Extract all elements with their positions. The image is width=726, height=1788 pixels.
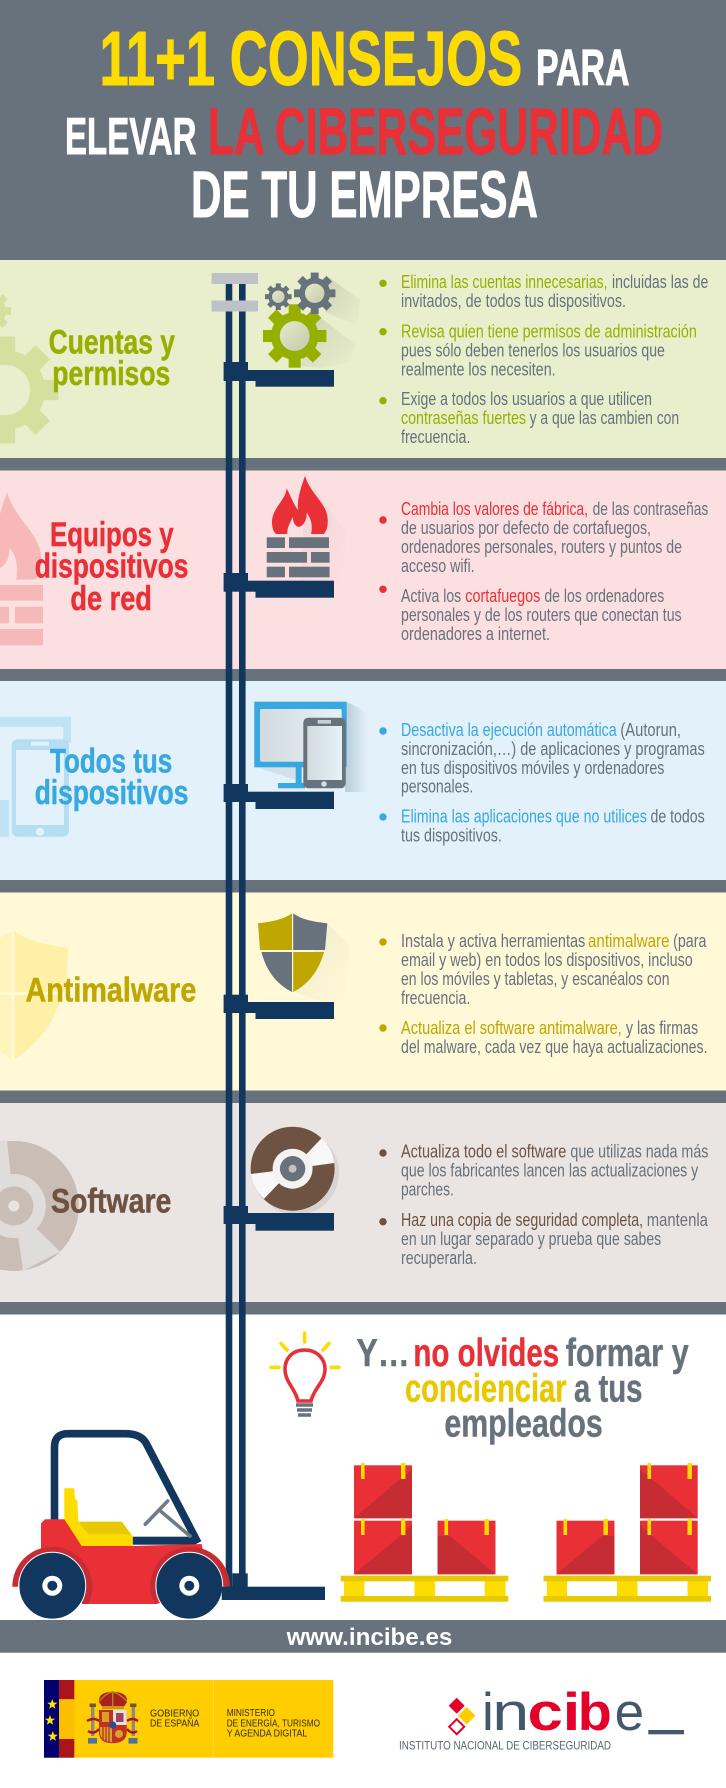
tip: cortafuegos: cortafuegos <box>465 586 540 606</box>
forklift <box>12 1434 325 1619</box>
heading: equipos y dispositivos de red <box>35 516 188 618</box>
icon: light bulb <box>271 1333 339 1415</box>
header background <box>0 0 726 261</box>
logo text <box>150 1707 320 1740</box>
tip: herramientas antimalware <box>379 931 707 1008</box>
tip: copia de seguridad: mantenla <box>647 1210 709 1230</box>
tip: valores de fábrica: de usuarios por defecto de cortafuegos, <box>401 518 651 538</box>
tip: actualiza software <box>379 1142 708 1200</box>
logo: incibe <box>399 1683 684 1752</box>
tip: aplicaciones <box>379 807 705 846</box>
tip: herramientas antimalware: antimalware <box>588 931 670 951</box>
logo text: MINISTERIO <box>227 1707 275 1719</box>
tip: aplicaciones: Elimina las aplicaciones que no utilices <box>401 807 647 827</box>
icon: gears <box>263 273 360 368</box>
wordmark: i <box>482 1683 494 1742</box>
tip: cortafuegos <box>379 586 682 644</box>
icon: faded firewall <box>0 492 43 645</box>
tip: ejecución automática <box>379 720 705 797</box>
heading: equipos y dispositivos de red: de red <box>70 580 152 618</box>
panel: software <box>0 1103 726 1302</box>
title: ELEVAR <box>65 108 196 166</box>
panel: cuentas y permisos <box>0 260 726 458</box>
icon: faded shield <box>0 931 68 1059</box>
forklift mast with shelves <box>212 273 334 1587</box>
tip: permisos de administración <box>379 321 697 379</box>
logo: gobierno de españa <box>44 1680 333 1758</box>
tip: aplicaciones: tus dispositivos. <box>401 826 502 846</box>
tip: ejecución automática: Desactiva la ejecución automática <box>401 720 617 740</box>
closing message: empleados <box>444 1403 603 1446</box>
tip: actualiza antimalware: Actualiza el software antimalware, <box>401 1018 622 1038</box>
tip: copia de seguridad: recuperarla. <box>401 1248 477 1268</box>
tip: ejecución automática: en tus dispositivos móviles y ordenadores <box>401 758 664 778</box>
tip: valores de fábrica <box>379 499 708 576</box>
logo text: GOBIERNO <box>150 1708 199 1720</box>
heading: cuentas y permisos <box>49 323 175 393</box>
panel: antimalware <box>0 892 726 1091</box>
tip: valores de fábrica: acceso wifi. <box>401 556 475 576</box>
tip: cuentas innecesarias: Elimina las cuentas innecesarias, <box>401 272 608 292</box>
heading: equipos y dispositivos de red: Equipos y <box>50 516 174 554</box>
footer bar with url: www.incibe.es <box>286 1624 452 1651</box>
heading: antimalware: Antimalware <box>26 972 196 1010</box>
title <box>65 16 663 231</box>
closing message: concienciar <box>405 1368 567 1411</box>
footer bar with url <box>0 1620 726 1653</box>
heading: equipos y dispositivos de red: dispositivos <box>35 548 188 586</box>
icon: faded gears <box>0 291 58 444</box>
tip: cortafuegos: de los ordenadores <box>544 586 664 606</box>
tip: cortafuegos: Activa los <box>401 586 461 606</box>
tip: contraseñas fuertes: frecuencia. <box>401 427 470 447</box>
closing message: formar y <box>566 1332 689 1375</box>
heading: cuentas y permisos: Cuentas y <box>49 323 175 361</box>
tip: contraseñas fuertes: Exige a todos los usuarios a que utilicen <box>401 389 652 409</box>
tip: contraseñas fuertes: y a que las cambien con <box>530 408 679 428</box>
wordmark: i <box>563 1683 580 1742</box>
tip: actualiza software: Actualiza todo el software <box>401 1142 566 1162</box>
closing message <box>356 1332 689 1446</box>
tip: herramientas antimalware: Instala y activa herramientas <box>401 931 585 951</box>
tip: herramientas antimalware: (para <box>673 931 707 951</box>
tip: ejecución automática: (Autorun, <box>620 720 681 740</box>
wordmark <box>482 1683 644 1742</box>
closing message: Y… <box>356 1332 410 1375</box>
tip: copia de seguridad: en un lugar separado y prueba que sabes <box>401 1229 661 1249</box>
icon: firewall <box>267 476 345 590</box>
tip: contraseñas fuertes <box>379 389 679 447</box>
icon: shield <box>258 913 350 1002</box>
logo text: DE ESPAÑA <box>150 1717 199 1730</box>
tip: cuentas innecesarias <box>379 272 708 311</box>
closing message: no olvides <box>413 1332 559 1375</box>
tip: cortafuegos: ordenadores a internet. <box>401 624 550 644</box>
icon: faded devices <box>0 717 71 837</box>
title: DE TU EMPRESA <box>191 157 538 231</box>
heading: software: Software <box>51 1183 171 1221</box>
wordmark: n <box>492 1683 529 1742</box>
heading: todos tus dispositivos: Todos tus <box>50 743 172 781</box>
tip: contraseñas fuertes: contraseñas fuertes <box>401 408 526 428</box>
icon: faded disc <box>0 1140 79 1271</box>
tip: permisos de administración: realmente los necesiten. <box>401 359 556 379</box>
wordmark: e <box>615 1683 644 1742</box>
tip: copia de seguridad <box>379 1210 709 1268</box>
tip: herramientas antimalware: frecuencia. <box>401 988 470 1008</box>
heading: cuentas y permisos: permisos <box>52 355 170 393</box>
logo: incibe: INSTITUTO NACIONAL DE CIBERSEGURIDAD <box>399 1738 611 1752</box>
wordmark: c <box>528 1683 563 1742</box>
tip: valores de fábrica: Cambia los valores de fábrica, <box>401 499 588 519</box>
tip: aplicaciones: de todos <box>650 807 705 827</box>
tip: actualiza antimalware: y las firmas <box>626 1018 698 1038</box>
title: PARA <box>536 39 630 96</box>
closing message: a tus <box>574 1368 642 1411</box>
icon: disc <box>251 1127 339 1215</box>
logo text: Y AGENDA DIGITAL <box>227 1728 307 1740</box>
tip: ejecución automática: personales. <box>401 777 473 797</box>
icon: monitor and phone <box>254 702 367 792</box>
panel: todos tus dispositivos <box>0 681 726 880</box>
tip: copia de seguridad: Haz una copia de seguridad completa, <box>401 1210 643 1230</box>
tip: cuentas innecesarias: invitados, de todos tus dispositivos. <box>401 291 626 311</box>
panel: equipos y dispositivos de red <box>0 470 726 670</box>
pallet with boxes: left <box>341 1463 508 1602</box>
wordmark: b <box>578 1683 612 1742</box>
diamonds <box>449 1698 475 1734</box>
title: 11+1 CONSEJOS <box>100 16 522 102</box>
pallet with boxes: right <box>544 1463 711 1602</box>
tip: actualiza software: parches. <box>401 1180 454 1200</box>
crest <box>87 1692 138 1744</box>
logo text: DE ENERGÍA, TURISMO <box>227 1717 320 1730</box>
heading: todos tus dispositivos <box>35 743 188 812</box>
heading: todos tus dispositivos: dispositivos <box>35 774 188 812</box>
tip: actualiza antimalware <box>379 1018 708 1057</box>
